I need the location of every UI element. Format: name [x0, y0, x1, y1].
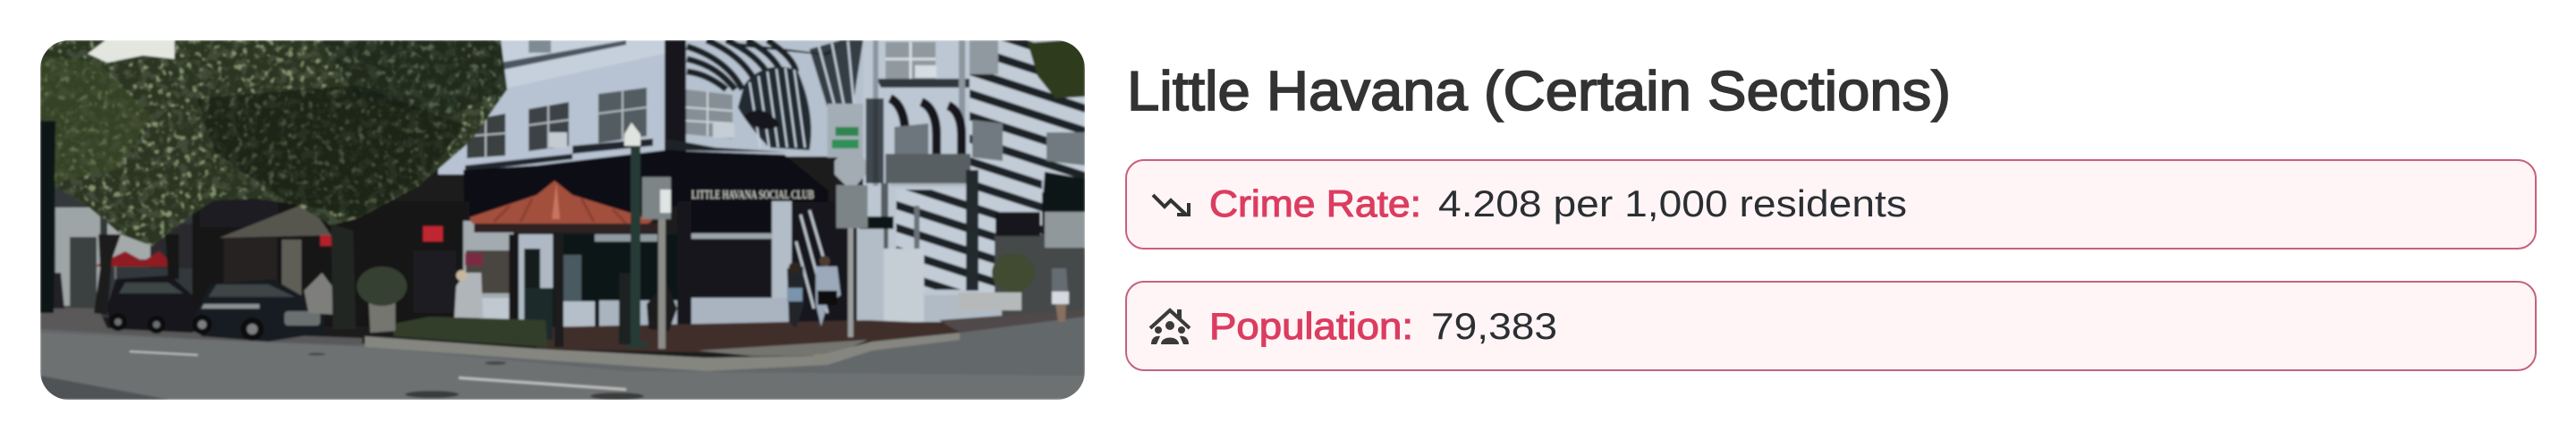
mural window — [686, 89, 733, 139]
red tile kiosk roof — [470, 181, 653, 224]
kiosk door panel and post — [519, 234, 553, 320]
planters and palm — [992, 253, 1035, 292]
electric box — [884, 249, 924, 322]
parking meter and sign post — [619, 273, 631, 344]
sidewalks — [40, 307, 362, 345]
storefront under tree — [192, 201, 470, 326]
small white store — [463, 221, 513, 319]
street signs and post — [848, 183, 853, 337]
sky — [46, 40, 176, 64]
zebra stripes right — [968, 40, 1085, 181]
lower mural — [866, 185, 970, 297]
light pillar near sign — [857, 228, 884, 322]
white and blue building upper left — [438, 40, 671, 174]
photo: Little Havana street corner — [40, 40, 1086, 400]
upper windows — [529, 40, 551, 53]
panel: population — [1126, 282, 2536, 370]
black awning — [463, 150, 828, 224]
right of kiosk store — [564, 234, 677, 326]
people on the sidewalk — [304, 273, 338, 315]
red umbrellas — [94, 251, 174, 267]
panel: crime rate — [1126, 160, 2536, 249]
icon: trending down arrow — [1153, 195, 1189, 215]
arches and balcony — [887, 93, 968, 156]
right end storefront — [995, 234, 1085, 319]
right white building — [861, 40, 1046, 194]
right corner tree — [1028, 40, 1085, 98]
mural eye — [738, 67, 811, 150]
crime rate label: Crime Rate: — [1209, 182, 1421, 224]
Storefront sign: LITTLE HAVANA SOCIAL CLUB — [691, 189, 814, 202]
icon: house with people — [1150, 309, 1190, 344]
population value: 79,383 — [1431, 305, 1557, 347]
urn planter — [369, 297, 395, 333]
tree trunks — [40, 121, 55, 313]
lane marks — [130, 351, 626, 391]
hedge — [394, 317, 547, 347]
Social club shop window — [691, 200, 770, 233]
population label: Population: — [1209, 305, 1413, 347]
mural building — [683, 40, 864, 159]
right car — [194, 279, 326, 342]
title: Little Havana (Certain Sections) — [1127, 61, 1951, 123]
crime rate value: 4.208 per 1,000 residents — [1438, 182, 1907, 224]
left building — [53, 187, 193, 318]
left car — [107, 275, 199, 333]
road — [40, 317, 1085, 377]
street lamp — [631, 146, 640, 347]
tree foliage — [40, 40, 507, 246]
